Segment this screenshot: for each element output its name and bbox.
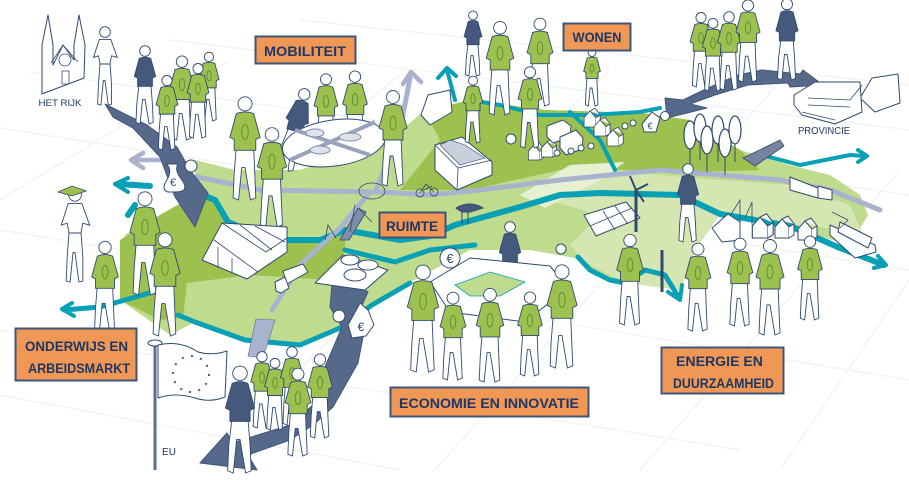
truck left xyxy=(275,264,308,293)
people: mobility group front xyxy=(230,90,407,227)
label: EU: EU xyxy=(162,447,176,458)
crate of waste materials xyxy=(435,137,492,190)
EU flag xyxy=(148,340,227,470)
map: land xyxy=(120,100,868,345)
arrow: EU to region xyxy=(200,273,368,470)
label: Provincie: PROVINCIE xyxy=(798,126,850,137)
people: Economie group xyxy=(407,248,577,382)
label: Ruimte xyxy=(380,212,446,238)
roads xyxy=(131,72,880,358)
label: Economie en innovatie xyxy=(390,388,588,416)
label: Wonen: WONEN xyxy=(572,29,622,45)
label: Energie en duurzaamheid: DUURZAAMHEID xyxy=(673,376,774,391)
icon: money bag and bulb lower xyxy=(333,303,374,338)
label: Wonen xyxy=(564,24,630,50)
icon: bulb near table xyxy=(556,244,566,254)
crates produce xyxy=(315,255,388,290)
icon: money bag and bulb right xyxy=(506,112,670,144)
people: Wonen group xyxy=(463,11,600,148)
label: Energie en duurzaamheid: ENERGIE EN xyxy=(676,354,763,369)
icon: money bag and bulb right: € xyxy=(647,121,653,131)
label: Economie en innovatie: ECONOMIE EN INNOVATIE xyxy=(399,395,579,411)
icon: bicycle xyxy=(416,184,438,197)
greenhouse xyxy=(202,223,287,279)
houses and small trees: residential cluster xyxy=(421,90,636,160)
person: navy woman at river xyxy=(677,164,699,242)
bridge left xyxy=(325,205,372,240)
bird xyxy=(456,204,483,224)
label: Energie en duurzaamheid xyxy=(662,348,784,394)
mobility table xyxy=(279,113,389,173)
truck right xyxy=(790,177,832,200)
people: Provincie group xyxy=(690,0,798,91)
trees xyxy=(684,114,741,175)
person: navy man behind map table xyxy=(499,222,521,300)
people: Het Rijk group xyxy=(94,27,219,150)
economy map table xyxy=(430,258,568,322)
houses with roofs right xyxy=(712,200,817,242)
label: Het Rijk: HET RIJK xyxy=(38,98,82,109)
church: Het Rijk xyxy=(42,15,85,94)
label: Onderwijs en arbeidsmarkt: ONDERWIJS EN xyxy=(25,339,128,354)
people: mobility group behind table xyxy=(273,71,367,173)
people: Energie group xyxy=(617,234,822,335)
people: Economie group: € xyxy=(446,251,454,266)
label: Mobiliteit: MOBILITEIT xyxy=(264,43,346,59)
icon: money bag and bulb left: € xyxy=(170,177,176,189)
label: Onderwijs en arbeidsmarkt xyxy=(16,328,136,380)
barge xyxy=(830,212,876,258)
building: Provincie xyxy=(794,74,900,124)
label: Onderwijs en arbeidsmarkt: ARBEIDSMARKT xyxy=(28,361,131,376)
label: Mobiliteit xyxy=(256,36,356,64)
bridge right xyxy=(743,140,784,166)
people: education and labour group xyxy=(58,186,180,336)
arrow: Provincie to region xyxy=(665,70,823,118)
icon: money bag and bulb lower: € xyxy=(358,320,365,334)
arrow: Rijk to region xyxy=(105,104,208,227)
rivers xyxy=(62,68,886,345)
people: EU group xyxy=(225,347,332,473)
label: Ruimte: RUIMTE xyxy=(386,218,438,234)
icon: money bag and bulb left xyxy=(164,160,197,192)
solar panels and wind turbine xyxy=(584,176,648,236)
